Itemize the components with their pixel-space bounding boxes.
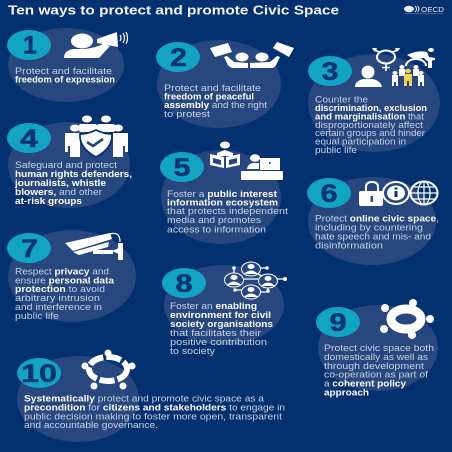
text: assembly and the right — [164, 100, 267, 110]
text: and marginalisation that — [315, 112, 424, 122]
text: to society — [170, 346, 215, 356]
icon: gender symbol — [372, 48, 400, 71]
text: hate speech and mis- and — [315, 232, 431, 242]
number 7: 7 — [21, 235, 38, 263]
text: discrimination, exclusion — [315, 103, 427, 113]
number 2: 2 — [170, 44, 187, 72]
panel 1: freedom of expression — [7, 28, 128, 102]
text: domestically as well as — [324, 352, 428, 362]
panel 10: systematic protection — [17, 350, 285, 442]
text: media and promotes — [167, 215, 261, 225]
text: Protect civic space both — [324, 343, 434, 353]
number 6: 6 — [320, 180, 338, 208]
panel 5: information ecosystem — [160, 142, 289, 244]
text: that facilitates their — [170, 328, 261, 338]
text: Protect and facilitate — [164, 83, 261, 93]
text — [164, 83, 267, 119]
text: blowers, and other — [15, 187, 102, 197]
icon: surveillance camera — [65, 233, 123, 260]
text: Counter the — [315, 95, 368, 105]
text: at-risk groups — [15, 196, 82, 206]
panel 7: privacy — [7, 230, 136, 322]
text: Respect privacy and — [15, 267, 109, 277]
text — [24, 394, 285, 430]
text — [15, 267, 115, 321]
text — [315, 214, 439, 250]
text — [170, 301, 273, 356]
text — [167, 189, 289, 234]
text: a coherent policy — [324, 378, 407, 388]
panel 6: online civic space — [307, 177, 439, 265]
text: access to information — [167, 224, 266, 234]
panel 4: defenders — [7, 116, 132, 208]
icon: protesters with placards — [210, 42, 294, 68]
text: Foster an enabling — [170, 301, 257, 311]
text: precondition for citizens and stakeholders to engage in — [24, 402, 285, 412]
panel 2: peaceful assembly — [156, 40, 294, 128]
text: positive contribution — [170, 337, 267, 347]
icon: wheelchair user — [406, 48, 435, 68]
title: Ten ways to protect and promote Civic Space — [8, 4, 339, 18]
number 4: 4 — [20, 125, 38, 153]
text: society organisations — [170, 319, 273, 329]
text: that protects independent — [167, 206, 289, 216]
number 8: 8 — [176, 270, 193, 298]
text: ensure personal data — [15, 276, 115, 286]
text: Protect online civic space , — [315, 214, 439, 224]
text — [14, 160, 132, 206]
text — [315, 95, 427, 155]
text: arbitrary intrusion — [15, 293, 100, 303]
panel 3: discrimination — [308, 48, 440, 155]
text: journalists, whistle — [14, 178, 106, 188]
text: certain groups and hinder — [315, 128, 425, 138]
icon: speaker with megaphone — [64, 32, 128, 58]
text: public decision making to foster more open, transparent — [24, 412, 282, 422]
text: Foster a public interest — [167, 189, 277, 199]
icon: connected network of people — [224, 262, 287, 299]
panel 8: enabling environment — [162, 262, 287, 356]
number 3: 3 — [322, 58, 338, 86]
text: Protect and facilitate — [15, 66, 112, 76]
text: public life — [15, 311, 59, 321]
number 5: 5 — [174, 154, 191, 182]
icon: people with shield — [65, 116, 128, 157]
text: and interference in — [15, 302, 102, 312]
text: and accountable governance. — [24, 420, 158, 430]
text: co-operation as part of — [324, 370, 428, 380]
text: freedom of peaceful — [164, 92, 254, 102]
text: environment for civil — [170, 310, 271, 320]
text: human rights defenders, — [15, 169, 132, 179]
OECD logo: OECD — [421, 5, 445, 14]
panel 9: policy coherence — [316, 299, 438, 398]
number 10 — [17, 358, 61, 388]
text: protection to avoid — [15, 284, 105, 294]
text — [324, 343, 434, 398]
icon: group of people — [392, 65, 424, 86]
number 10: 10 — [21, 360, 57, 388]
text: through development — [324, 361, 425, 371]
text: information ecosystem — [167, 198, 278, 208]
icon: reader and desk with computer — [210, 142, 283, 180]
text: equal participation in — [315, 136, 406, 146]
icon: padlock, information, globe — [359, 181, 438, 206]
icon: woman — [355, 66, 382, 87]
text: including by countering — [315, 222, 423, 232]
text: disinformation — [315, 240, 383, 250]
text: approach — [324, 388, 369, 398]
text: Safeguard and protect — [15, 160, 117, 170]
icon: people in a circle — [82, 350, 136, 390]
text: freedom of expression — [15, 74, 115, 84]
text: Systematically protect and promote civic space as a — [24, 394, 265, 404]
text: disproportionately affect — [315, 120, 423, 130]
text — [15, 66, 115, 84]
text: to protest — [164, 109, 211, 119]
OECD logo — [404, 5, 445, 14]
icon: people around a table — [380, 299, 434, 339]
text: public life — [315, 145, 357, 155]
number 9: 9 — [330, 309, 346, 337]
number 1: 1 — [23, 32, 37, 60]
